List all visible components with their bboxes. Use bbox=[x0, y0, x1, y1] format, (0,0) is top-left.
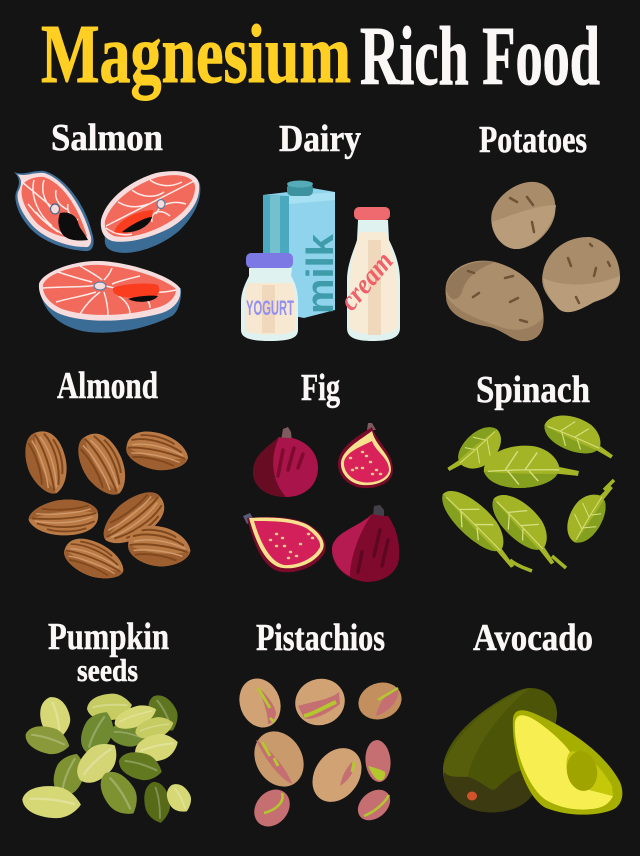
heading: Pumpkin seeds: Pumpkin bbox=[48, 616, 169, 658]
illustration: pumpkin seeds bbox=[21, 690, 196, 825]
illustration: pistachios bbox=[233, 672, 407, 834]
illustration: whole fig, lower right bbox=[332, 505, 399, 582]
heading: Almond: Almond bbox=[57, 365, 158, 407]
illustration: whole avocado bbox=[443, 688, 557, 812]
panel: avocado bbox=[443, 617, 622, 815]
heading: Pistachios: Pistachios bbox=[256, 617, 385, 659]
panel: pumpkin seeds: seeds bbox=[77, 652, 138, 688]
illustration: yogurt jar bbox=[241, 253, 298, 341]
panel: pumpkin seeds bbox=[21, 616, 196, 825]
illustration: milk carton bbox=[263, 180, 342, 318]
heading: Fig: Fig bbox=[301, 367, 340, 409]
illustration: salmon steak, upper right bbox=[101, 171, 200, 253]
label: yogurt: YOGURT bbox=[246, 297, 294, 320]
panel: pistachios bbox=[233, 617, 407, 834]
panel: spinach bbox=[434, 369, 621, 574]
illustration: potato, right bbox=[542, 237, 620, 312]
illustration: halved avocado bbox=[513, 710, 622, 815]
panel: dairy bbox=[241, 118, 400, 341]
panel: potatoes bbox=[445, 119, 620, 341]
heading: Dairy: Dairy bbox=[279, 118, 361, 160]
illustration: potato, top bbox=[491, 182, 556, 249]
label: cream: cream bbox=[334, 246, 400, 316]
illustration: cream bottle bbox=[334, 207, 400, 341]
panel: fig bbox=[243, 367, 399, 582]
heading: Potatoes: Potatoes bbox=[479, 119, 587, 161]
panel: almond bbox=[18, 365, 193, 587]
illustration: salmon steak, upper left bbox=[14, 171, 94, 251]
heading: Avocado: Avocado bbox=[473, 617, 593, 659]
heading: Spinach: Spinach bbox=[476, 369, 590, 411]
illustration: halved fig, upper right bbox=[338, 423, 393, 488]
label: milk: milk bbox=[300, 233, 342, 314]
panel: salmon bbox=[14, 117, 200, 333]
illustration: almonds bbox=[18, 426, 193, 587]
illustration: spinach leaves bbox=[434, 407, 621, 574]
illustration: halved fig, lower left bbox=[243, 513, 326, 572]
heading: Salmon: Salmon bbox=[51, 117, 163, 159]
illustration: whole fig, upper left bbox=[253, 427, 318, 497]
title: Magnesium bbox=[41, 8, 351, 101]
illustration: potato, lower left bbox=[445, 261, 544, 341]
illustration: salmon steak, bottom bbox=[39, 261, 181, 333]
